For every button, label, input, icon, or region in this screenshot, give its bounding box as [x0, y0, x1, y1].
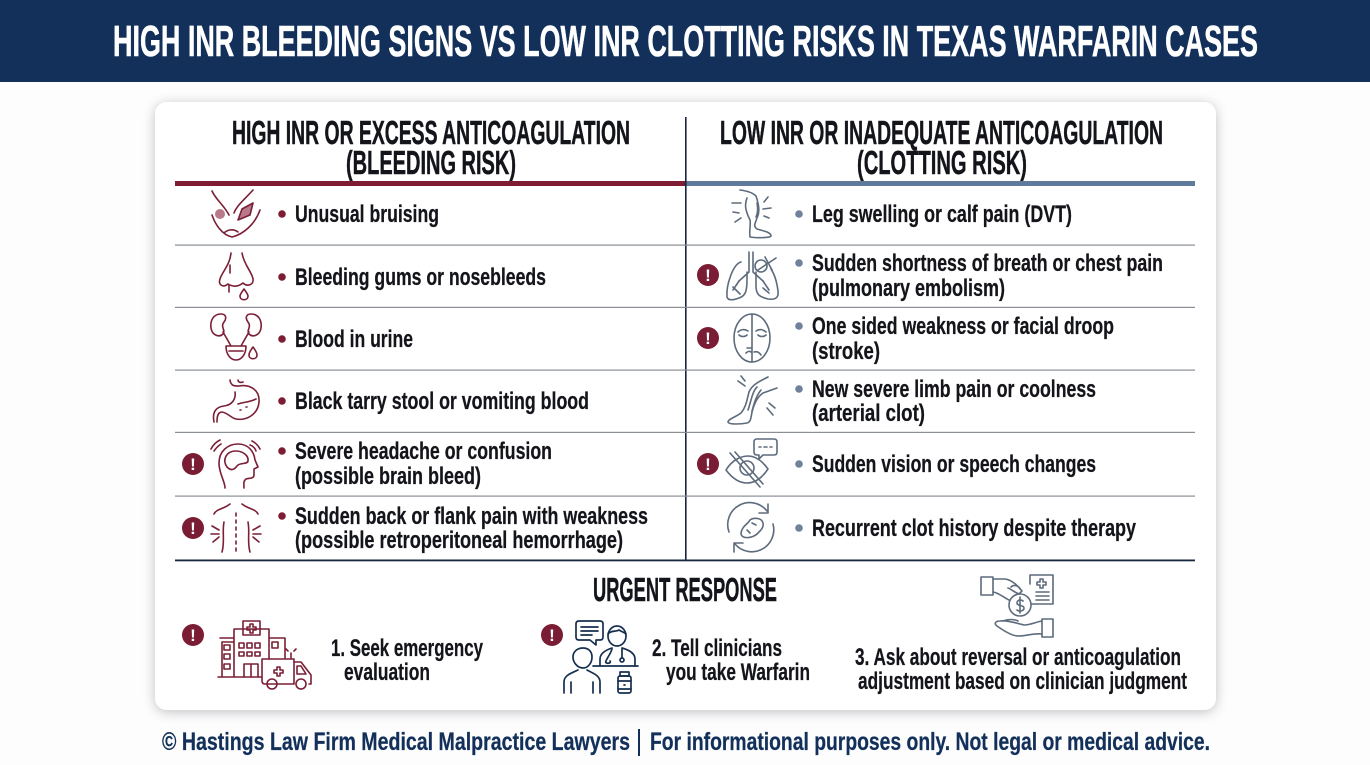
icon: alert: !: [190, 455, 196, 474]
row: shortness of breath: (pulmonary embolism): [812, 275, 1005, 302]
row: leg swelling: Leg swelling or calf pain (DVT): [812, 201, 1072, 228]
icon: kidneys and bladder: [211, 314, 261, 360]
icon: alert: !: [549, 626, 555, 645]
icon: head with brain: [211, 440, 260, 488]
row: blood in urine: [211, 314, 413, 360]
icon: alert: [697, 264, 719, 286]
row: leg swelling: [732, 190, 1072, 238]
row: shortness of breath: Sudden shortness of breath or chest pain: [812, 250, 1163, 277]
panel: bleeding risk heading: (BLEEDING RISK): [346, 144, 516, 181]
icon: lungs with clot: [727, 252, 778, 300]
row: black tarry stool: [213, 380, 589, 422]
step 2: tell clinicians: you take Warfarin: [666, 659, 810, 686]
panel: clotting risk heading: [720, 114, 1163, 181]
title banner: [0, 0, 1370, 82]
icon: nose: [220, 253, 253, 300]
icon: stomach: [213, 380, 259, 422]
row: limb pain: (arterial clot): [812, 400, 925, 427]
icon: swollen leg: [732, 190, 771, 238]
row: recurrent clot history: [728, 503, 1136, 552]
row: one sided weakness: (stroke): [812, 338, 880, 365]
row: recurrent clot history: Recurrent clot history despite therapy: [812, 515, 1136, 542]
row: unusual bruising: Unusual bruising: [295, 201, 439, 228]
row: severe headache: [182, 438, 552, 490]
footer disclaimer: For informational purposes only. Not legal or medical advice.: [650, 728, 1210, 756]
step 1: seek emergency evaluation: [182, 621, 483, 689]
icon: alert: !: [190, 626, 196, 645]
icon: hands with coin and document: [981, 575, 1053, 637]
panel: main card: [155, 102, 1216, 710]
icon: bruise: [212, 190, 260, 237]
icon: alert: [541, 624, 563, 646]
step 3: ask about reversal: 3. Ask about reversal or anticoagulation: [855, 644, 1181, 671]
icon: alert: [182, 517, 204, 539]
icon: alert: [697, 327, 719, 349]
footer disclaimer: © Hastings Law Firm Medical Malpractice Lawyers: [162, 728, 630, 756]
icon: leg with arterial lines: [728, 376, 777, 424]
icon: alert: !: [705, 455, 711, 474]
icon: alert: !: [705, 266, 711, 285]
icon: back with spine: [211, 504, 261, 552]
row: sudden back or flank pain: Sudden back or flank pain with weakness: [295, 503, 648, 530]
row: vision or speech changes: [697, 439, 1096, 487]
panel: clotting risk heading: (CLOTTING RISK): [857, 144, 1027, 181]
step 1: seek emergency evaluation: 1. Seek emergency: [331, 635, 483, 662]
panel: bleeding risk heading: [232, 114, 630, 181]
row: severe headache: Severe headache or confusion: [295, 438, 552, 465]
icon: alert: [182, 453, 204, 475]
step 3: ask about reversal: adjustment based on clinician judgment: [858, 668, 1187, 695]
row: blood in urine: Blood in urine: [295, 326, 413, 353]
icon: alert: !: [190, 519, 196, 538]
row: limb pain: New severe limb pain or coolness: [812, 376, 1096, 403]
row: sudden back or flank pain: [182, 503, 648, 554]
icon: face with droop: [734, 314, 770, 362]
row: vision or speech changes: Sudden vision or speech changes: [812, 451, 1096, 478]
icon: eye with speech bubble: [726, 439, 777, 487]
icon: clot with cycle arrows: [728, 503, 774, 552]
row: severe headache: (possible brain bleed): [295, 463, 481, 490]
row: one sided weakness: One sided weakness or facial droop: [812, 313, 1114, 340]
heading: urgent response: URGENT RESPONSE: [593, 571, 777, 608]
row: sudden back or flank pain: (possible retroperitoneal hemorrhage): [295, 527, 623, 554]
step 3: ask about reversal: [855, 575, 1187, 695]
row: one sided weakness: [697, 313, 1114, 365]
icon: alert: [697, 453, 719, 475]
row: bleeding gums or nosebleeds: Bleeding gums or nosebleeds: [295, 264, 546, 291]
step 2: tell clinicians: [541, 621, 810, 693]
step 1: seek emergency evaluation: evaluation: [344, 659, 430, 686]
row: shortness of breath: [697, 250, 1163, 302]
row: bleeding gums or nosebleeds: [220, 253, 546, 300]
step 2: tell clinicians: 2. Tell clinicians: [652, 635, 782, 662]
footer disclaimer: [162, 728, 1210, 756]
icon: alert: !: [705, 329, 711, 348]
icon: patient talking with doctor: [564, 621, 638, 693]
panel: bleeding risk heading: HIGH INR OR EXCESS ANTICOAGULATION: [232, 114, 630, 151]
icon: hospital and ambulance: [218, 621, 311, 689]
row: black tarry stool: Black tarry stool or vomiting blood: [295, 388, 589, 415]
row: limb pain: [728, 376, 1096, 427]
icon: alert: [182, 624, 204, 646]
row: unusual bruising: [212, 190, 439, 237]
